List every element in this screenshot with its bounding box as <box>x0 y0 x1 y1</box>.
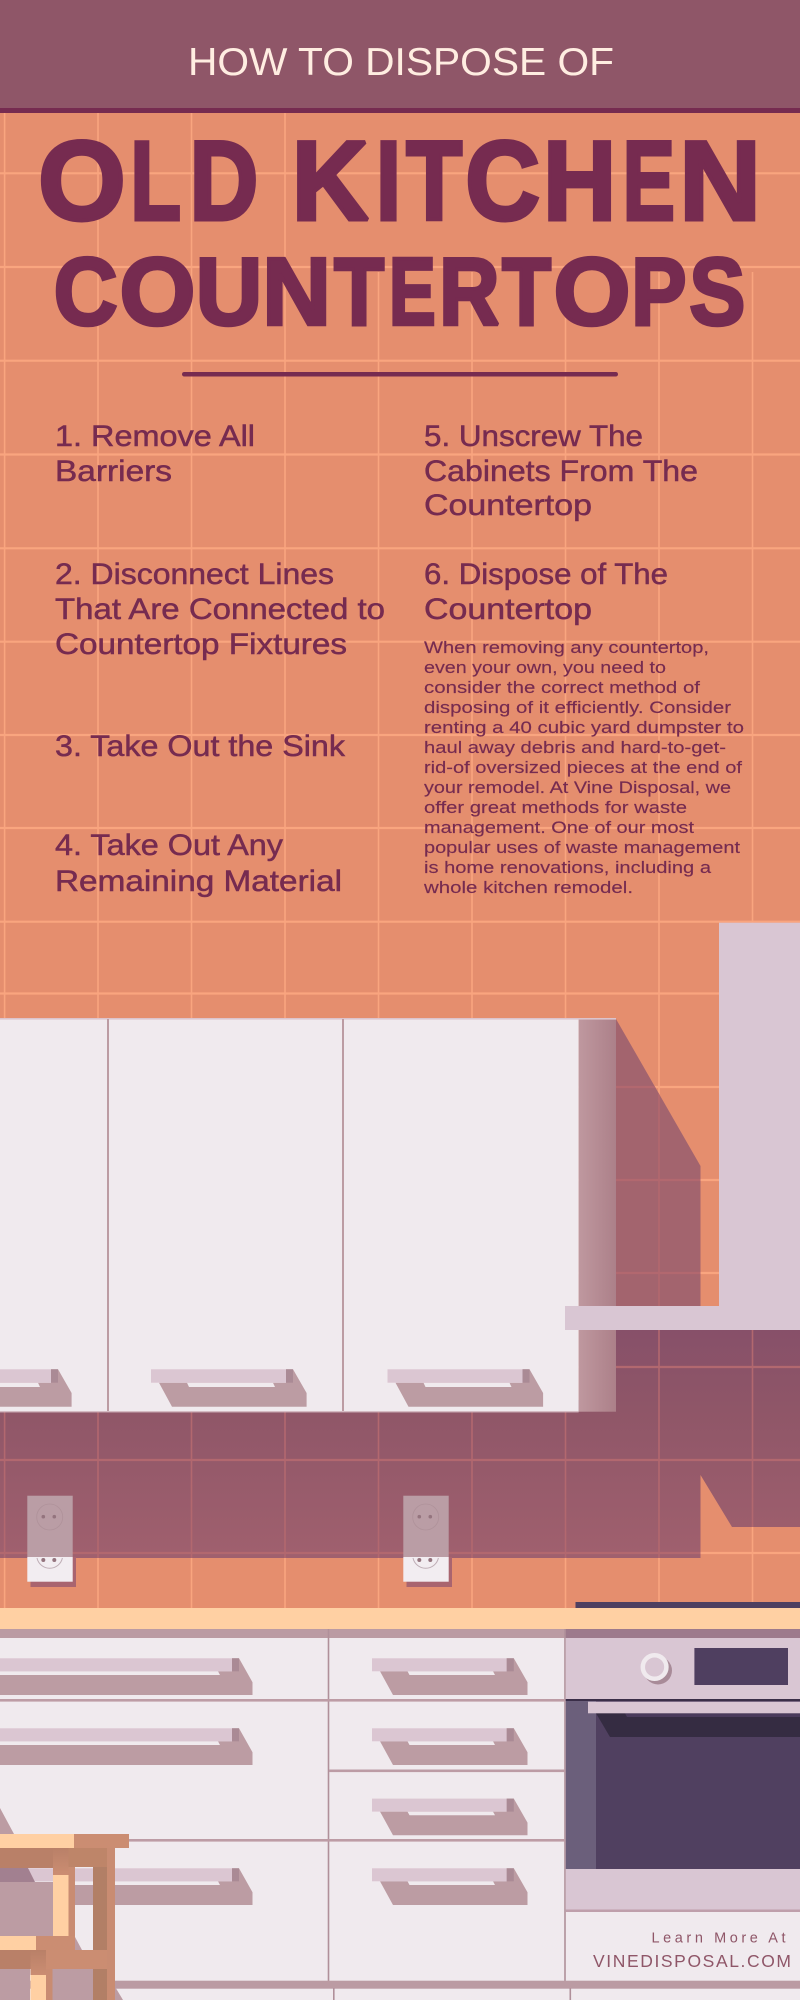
header band <box>0 0 800 113</box>
drawer handle wide 2 <box>0 1728 252 1765</box>
control panel <box>566 1638 800 1699</box>
title: O <box>38 119 126 244</box>
title: T <box>406 119 462 244</box>
step 1 <box>55 420 255 488</box>
step 2: That Are Connected to <box>55 593 385 626</box>
wall outlet left <box>27 1496 76 1587</box>
step 6 <box>424 558 668 626</box>
stool cast shadow <box>0 1808 123 2000</box>
body paragraph: your remodel. At Vine Disposal, we <box>424 778 731 797</box>
body paragraph: popular uses of waste management <box>424 838 740 857</box>
seat top <box>0 1834 74 1848</box>
step 6: Countertop <box>424 593 592 626</box>
body paragraph: rid-of oversized pieces at the end of <box>424 758 742 777</box>
hood shelf <box>565 1306 800 1330</box>
drawer handle narrow 4 <box>372 1868 528 1905</box>
oven <box>566 1638 800 1912</box>
far leg <box>93 1867 107 2000</box>
right column steps <box>424 420 698 626</box>
lower cabinets <box>0 1629 800 2000</box>
door handle <box>588 1702 800 1713</box>
title: E <box>623 119 675 244</box>
title: T <box>502 239 551 345</box>
upper handle 3 <box>388 1369 543 1407</box>
body paragraph: When removing any countertop, <box>424 638 709 657</box>
title: E <box>389 239 436 345</box>
apron <box>0 1848 53 1868</box>
step 5 <box>424 420 698 522</box>
upper handle 2 <box>151 1369 307 1407</box>
divider <box>182 372 618 376</box>
left column steps <box>55 420 385 898</box>
drawer handle wide 3 <box>0 1868 252 1905</box>
step 4: Remaining Material <box>55 865 342 898</box>
body paragraph: is home renovations, including a <box>424 858 712 877</box>
title: N <box>262 239 331 345</box>
title: T <box>334 239 384 345</box>
oven body <box>566 1699 800 1869</box>
body paragraph: renting a 40 cubic yard dumpster to <box>424 718 744 737</box>
step 2: 2. Disconnect Lines <box>55 558 334 591</box>
title: H <box>543 119 616 244</box>
lower rung <box>0 1936 36 1950</box>
footer call to action <box>593 1931 791 1971</box>
footer call to action: VINEDISPOSAL.COM <box>593 1951 791 1971</box>
title: K <box>292 119 369 244</box>
wall shadow <box>0 1019 800 1558</box>
title: R <box>439 239 500 345</box>
door handle shadow <box>596 1713 800 1737</box>
header text: HOW TO DISPOSE OF <box>188 41 614 84</box>
upper handle 1 <box>0 1369 72 1407</box>
title: P <box>631 239 686 345</box>
body paragraph: consider the correct method of <box>424 678 700 697</box>
step 6: 6. Dispose of The <box>424 558 668 591</box>
body paragraph: haul away debris and hard-to-get- <box>424 738 726 757</box>
body paragraph: disposing of it efficiently. Consider <box>424 698 731 717</box>
step 5: 5. Unscrew The <box>424 420 643 453</box>
countertop <box>0 1608 800 1629</box>
oven base <box>566 1869 800 1910</box>
body paragraph: offer great methods for waste <box>424 798 687 817</box>
front leg upper <box>53 1848 68 1875</box>
title: I <box>376 119 401 244</box>
drawer handle wide 1 <box>0 1658 252 1695</box>
body paragraph <box>423 638 744 897</box>
body paragraph: even your own, you need to <box>424 658 666 677</box>
title: L <box>130 119 181 244</box>
upper cabinets <box>0 1018 800 1412</box>
display <box>694 1648 788 1685</box>
step 2: Countertop Fixtures <box>55 628 347 661</box>
body paragraph: whole kitchen remodel. <box>423 878 633 897</box>
range hood <box>719 923 800 1330</box>
step 4: 4. Take Out Any <box>55 829 283 862</box>
step 1: Barriers <box>55 455 172 488</box>
title <box>38 119 761 345</box>
title: C <box>54 239 118 345</box>
wall outlet right <box>403 1496 452 1587</box>
front leg lower <box>30 1950 46 1975</box>
footer call to action: Learn More At <box>652 1931 786 1947</box>
title: D <box>190 119 258 244</box>
step 5: Cabinets From The <box>424 455 698 488</box>
knob <box>643 1655 672 1684</box>
step 2 <box>55 558 385 661</box>
stool <box>0 1808 129 2000</box>
title: N <box>679 119 761 244</box>
drawer handle narrow 1 <box>372 1658 528 1695</box>
step 5: Countertop <box>424 489 592 522</box>
title: U <box>196 239 262 345</box>
stove top <box>576 1602 800 1608</box>
step 1: 1. Remove All <box>55 420 255 453</box>
drawer handle narrow 3 <box>372 1799 528 1835</box>
title: O <box>554 239 630 345</box>
body paragraph: management. One of our most <box>424 818 694 837</box>
title: O <box>120 239 195 345</box>
title: C <box>465 119 540 244</box>
step 3: 3. Take Out the Sink <box>55 730 345 763</box>
drawer handle narrow 2 <box>372 1728 528 1765</box>
step 4 <box>55 829 342 898</box>
title: S <box>689 239 745 345</box>
